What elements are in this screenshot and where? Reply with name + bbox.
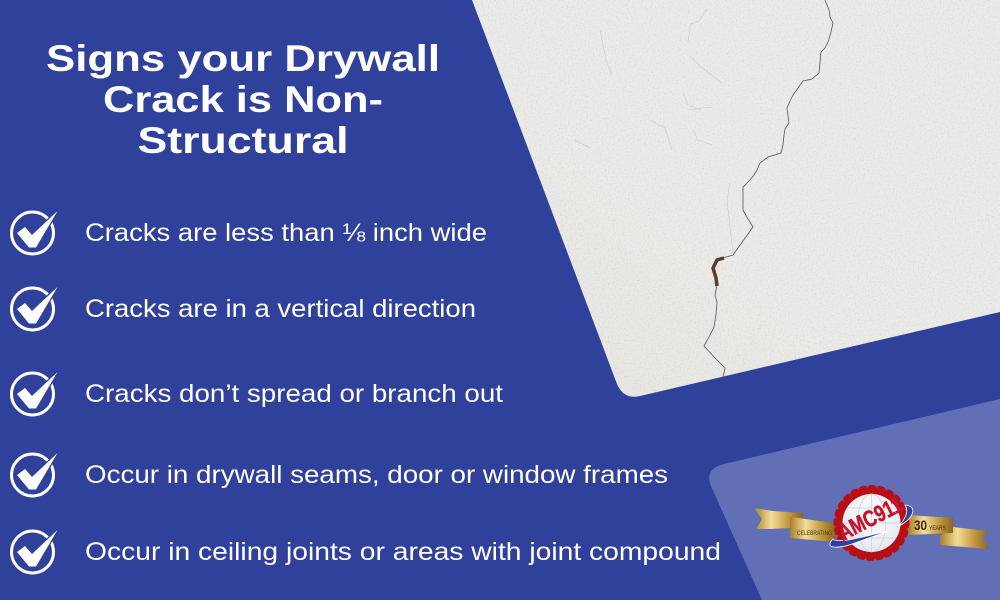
rosette <box>836 488 906 558</box>
item 1 <box>12 211 487 254</box>
photo: cracked drywall <box>460 0 1000 400</box>
ribbon text: 30 years: 30 <box>914 517 927 533</box>
icon: check <box>12 530 58 573</box>
text: Cracks are in a vertical direction <box>85 295 476 323</box>
text: Cracks are less than ⅛ inch wide <box>85 219 487 247</box>
item 4 <box>12 453 668 496</box>
swoosh <box>830 505 913 547</box>
title: Structural <box>138 120 348 161</box>
ribbon text: celebrating: CELEBRATING <box>797 530 832 537</box>
item 5 <box>12 530 721 573</box>
item 3 <box>12 372 503 415</box>
light panel <box>709 399 1000 600</box>
icon: check <box>12 287 58 330</box>
right ribbon front <box>908 515 953 535</box>
text: Cracks don’t spread or branch out <box>85 380 503 408</box>
text: Occur in ceiling joints or areas with joint compound <box>85 538 721 566</box>
right ribbon tail <box>940 527 989 549</box>
title: Signs your Drywall <box>46 38 440 79</box>
globe <box>842 494 900 552</box>
faint hairline cracks <box>575 9 733 253</box>
left ribbon tail <box>754 508 803 529</box>
text: Occur in drywall seams, door or window frames <box>85 461 668 489</box>
icon: check <box>12 453 58 496</box>
left ribbon front <box>790 517 835 542</box>
main crack <box>704 0 833 377</box>
logo text: AMC911 <box>833 491 907 545</box>
icon: check <box>12 372 58 415</box>
ribbon text: 30 years <box>914 517 947 533</box>
logo: AMC911 30 years <box>754 488 989 558</box>
title: Crack is Non- <box>103 79 383 120</box>
icon: check <box>12 211 58 254</box>
crack hole <box>713 258 724 286</box>
ribbon text: 30 years: YEARS <box>929 525 947 532</box>
item 2 <box>12 287 476 330</box>
title <box>46 38 440 161</box>
